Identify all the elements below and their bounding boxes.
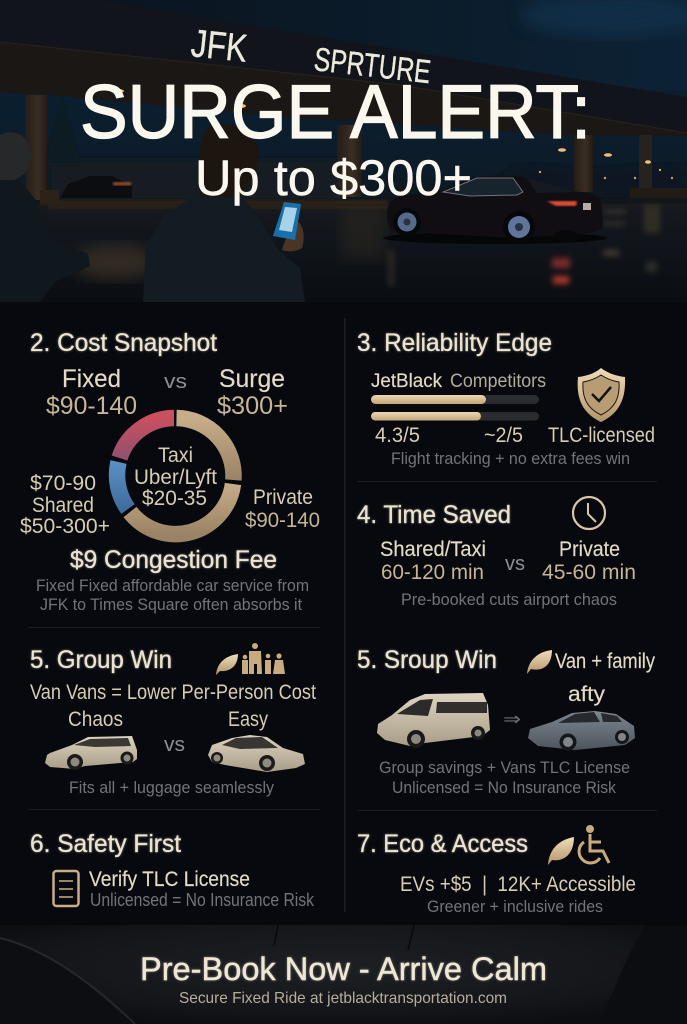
donut centre labels: $20-35: [142, 487, 207, 510]
sedan: [528, 711, 635, 750]
distant car: [60, 176, 132, 198]
footer banner: [0, 925, 687, 1024]
heading: group win: 5. Group Win: [30, 646, 172, 674]
car: minivan chaos: [45, 736, 137, 770]
bar labels: JetBlack: [371, 371, 442, 392]
bar labels: Competitors: [450, 371, 546, 392]
icon: leaf: [216, 654, 238, 675]
private time: [542, 538, 636, 584]
private price label: Private: [253, 486, 313, 509]
panel: cost snapshot: [20, 329, 320, 614]
heading: sroup win: 5. Sroup Win: [357, 646, 497, 674]
vs label: vs: [505, 553, 525, 575]
van: [377, 693, 490, 748]
person at left: [0, 132, 90, 302]
donut chart: [117, 418, 234, 534]
heading: time saved: 4. Time Saved: [357, 501, 511, 529]
call to action: Pre-Book Now - Arrive Calm: [140, 951, 547, 987]
shared price label: Shared: [32, 494, 94, 517]
panel: time saved: [357, 497, 636, 609]
savings note: Group savings + Vans TLC License: [379, 759, 630, 777]
luggage note: Fits all + luggage seamlessly: [69, 779, 275, 797]
reliability note: Flight tracking + no extra fees win: [391, 450, 630, 468]
donut centre labels: Uber/Lyft: [134, 466, 217, 489]
icon: clock: [573, 497, 605, 529]
column divider: [344, 318, 346, 912]
insurance note: Unlicensed = No Insurance Risk: [90, 890, 315, 910]
shared taxi time: Shared/Taxi: [380, 538, 486, 561]
shared price label: $50-300+: [20, 515, 110, 538]
heading: eco and access: 7. Eco & Access: [357, 830, 528, 858]
reflections: [388, 205, 660, 286]
rating bars: [371, 395, 539, 420]
surge price: $300+: [217, 392, 288, 420]
fixed price: Fixed: [62, 365, 121, 393]
shared taxi time: [380, 538, 486, 584]
afty label: afty: [568, 683, 606, 706]
donut centre labels: [134, 444, 217, 510]
private time: 45-60 min: [542, 561, 636, 584]
subtitle: Up to $300+: [195, 150, 472, 206]
surge price: [217, 365, 288, 420]
chaos label: Chaos: [68, 708, 123, 731]
panel: safety first: [30, 830, 315, 910]
donut centre labels: Taxi: [158, 444, 193, 467]
heading: safety first: 6. Safety First: [30, 830, 181, 858]
savings note: Unlicensed = No Insurance Risk: [392, 779, 617, 797]
fixed price: $90-140: [46, 392, 137, 420]
main title: SURGE ALERT:: [80, 70, 591, 155]
ceiling lights: [112, 89, 651, 164]
heading: reliability edge: 3. Reliability Edge: [357, 329, 552, 357]
sign: SPRTURE: SPRTURE: [312, 40, 433, 90]
private time: Private: [559, 538, 620, 561]
panel: reliability edge: [357, 329, 655, 468]
van family label: Van + family: [555, 650, 655, 673]
arrow: ⇒: [503, 709, 521, 730]
time note: Pre-booked cuts airport chaos: [401, 591, 617, 609]
private price label: [245, 486, 320, 532]
panel: group win right: [357, 646, 655, 797]
black sedan: [383, 176, 607, 244]
shared price label: [20, 472, 110, 538]
sign: JFK: JFK: [189, 22, 249, 71]
van savings line: Van Vans = Lower Per-Person Cost: [30, 681, 316, 704]
ev and accessible stat: EVs +$5 | 12K+ Accessible: [400, 873, 636, 896]
person with phone: [143, 124, 305, 302]
fixed price: [46, 365, 137, 420]
easy label: Easy: [228, 708, 268, 731]
verify license: Verify TLC License: [89, 868, 250, 891]
icon: leaf: [548, 837, 574, 865]
heading: cost snapshot: 2. Cost Snapshot: [30, 329, 217, 357]
congestion fee: $9 Congestion Fee: [70, 546, 277, 574]
rating values: ~2/5: [484, 424, 523, 447]
eco note: Greener + inclusive rides: [427, 898, 603, 916]
shared taxi time: 60-120 min: [381, 561, 484, 584]
vs label: vs: [164, 734, 185, 756]
ground: [0, 205, 687, 302]
congestion note: [36, 577, 309, 614]
bar labels: [371, 371, 546, 392]
rating values: [375, 424, 523, 447]
car interior shapes: [0, 925, 687, 1024]
rating values: 4.3/5: [375, 424, 420, 447]
canopy roof: [0, 0, 687, 135]
website line: Secure Fixed Ride at jetblacktransportation.com: [179, 990, 507, 1007]
pillars: [25, 95, 47, 200]
icon: leaf: [527, 650, 552, 674]
vs label: vs: [164, 371, 187, 393]
icon: wheelchair: [579, 826, 609, 863]
savings note: [379, 759, 630, 797]
shared price label: $70-90: [30, 472, 96, 495]
icon: family: [242, 643, 285, 674]
panel: group win left: [30, 643, 316, 797]
private price label: $90-140: [245, 509, 320, 532]
congestion note: JFK to Times Square often absorbs it: [40, 596, 302, 614]
panel: eco and access: [357, 826, 636, 916]
car: sedan easy: [208, 735, 305, 772]
hero photo: airport pickup at night: [0, 0, 687, 302]
tlc licensed label: TLC-licensed: [548, 424, 655, 447]
icon: shield: [578, 368, 625, 422]
surge price: Surge: [219, 365, 285, 393]
congestion note: Fixed Fixed affordable car service from: [36, 577, 309, 595]
icon: checklist: [54, 871, 78, 906]
